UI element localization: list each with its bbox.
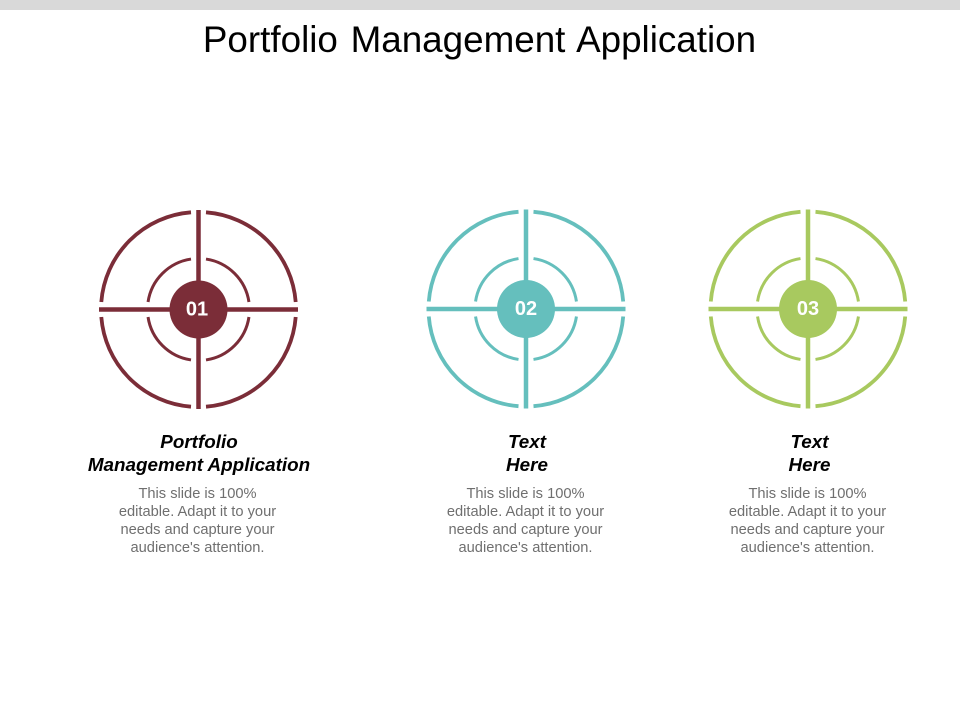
column 2 body text: audience's attention. [458,540,592,556]
column 2 heading: Here [506,454,548,475]
inner ring arcs [758,259,858,359]
target icon 03 [708,210,908,408]
outer ring arcs [101,212,296,407]
column 2 body text: editable. Adapt it to your [447,504,604,520]
column 3 body text: editable. Adapt it to your [729,504,886,520]
column 2 body text: needs and capture your [448,522,603,538]
column 1 heading: Portfolio [160,431,238,452]
outer ring arcs [711,212,905,406]
crosshair lines [426,210,626,408]
crosshair lines [99,210,298,409]
column 3 body text: audience's attention. [740,540,874,556]
column 3 heading: Here [789,454,830,475]
column 2 heading [506,431,548,475]
column 1 body text: editable. Adapt it to your [119,504,276,520]
column 1 heading [88,431,310,475]
column 1 body text [119,486,276,556]
column 1 body text: audience's attention. [130,540,264,556]
centre disc [779,280,837,338]
inner ring arcs [476,259,576,359]
column 2 body text: This slide is 100% [466,486,585,502]
number 03: 03 [797,298,819,320]
title: Portfolio Management Application [203,19,756,60]
centre disc [170,280,228,338]
column 3 body text [729,486,886,556]
column 3 heading [789,431,830,475]
target icon 01 [99,210,298,409]
number 01: 01 [186,298,208,320]
column 1 body text: needs and capture your [120,522,275,538]
column 1 heading: Management Application [88,454,310,475]
centre disc [497,280,555,338]
column 2 heading: Text [508,431,547,452]
inner ring arcs [148,259,249,360]
outer ring arcs [429,212,623,406]
column 3 heading: Text [790,431,829,452]
column 3 body text: This slide is 100% [748,486,867,502]
crosshair lines [708,210,908,408]
column 3 body text: needs and capture your [730,522,885,538]
column 2 body text [447,486,604,556]
top grey bar [0,0,960,10]
target icon 02 [426,210,626,408]
number 02: 02 [515,298,537,320]
column 1 body text: This slide is 100% [138,486,257,502]
